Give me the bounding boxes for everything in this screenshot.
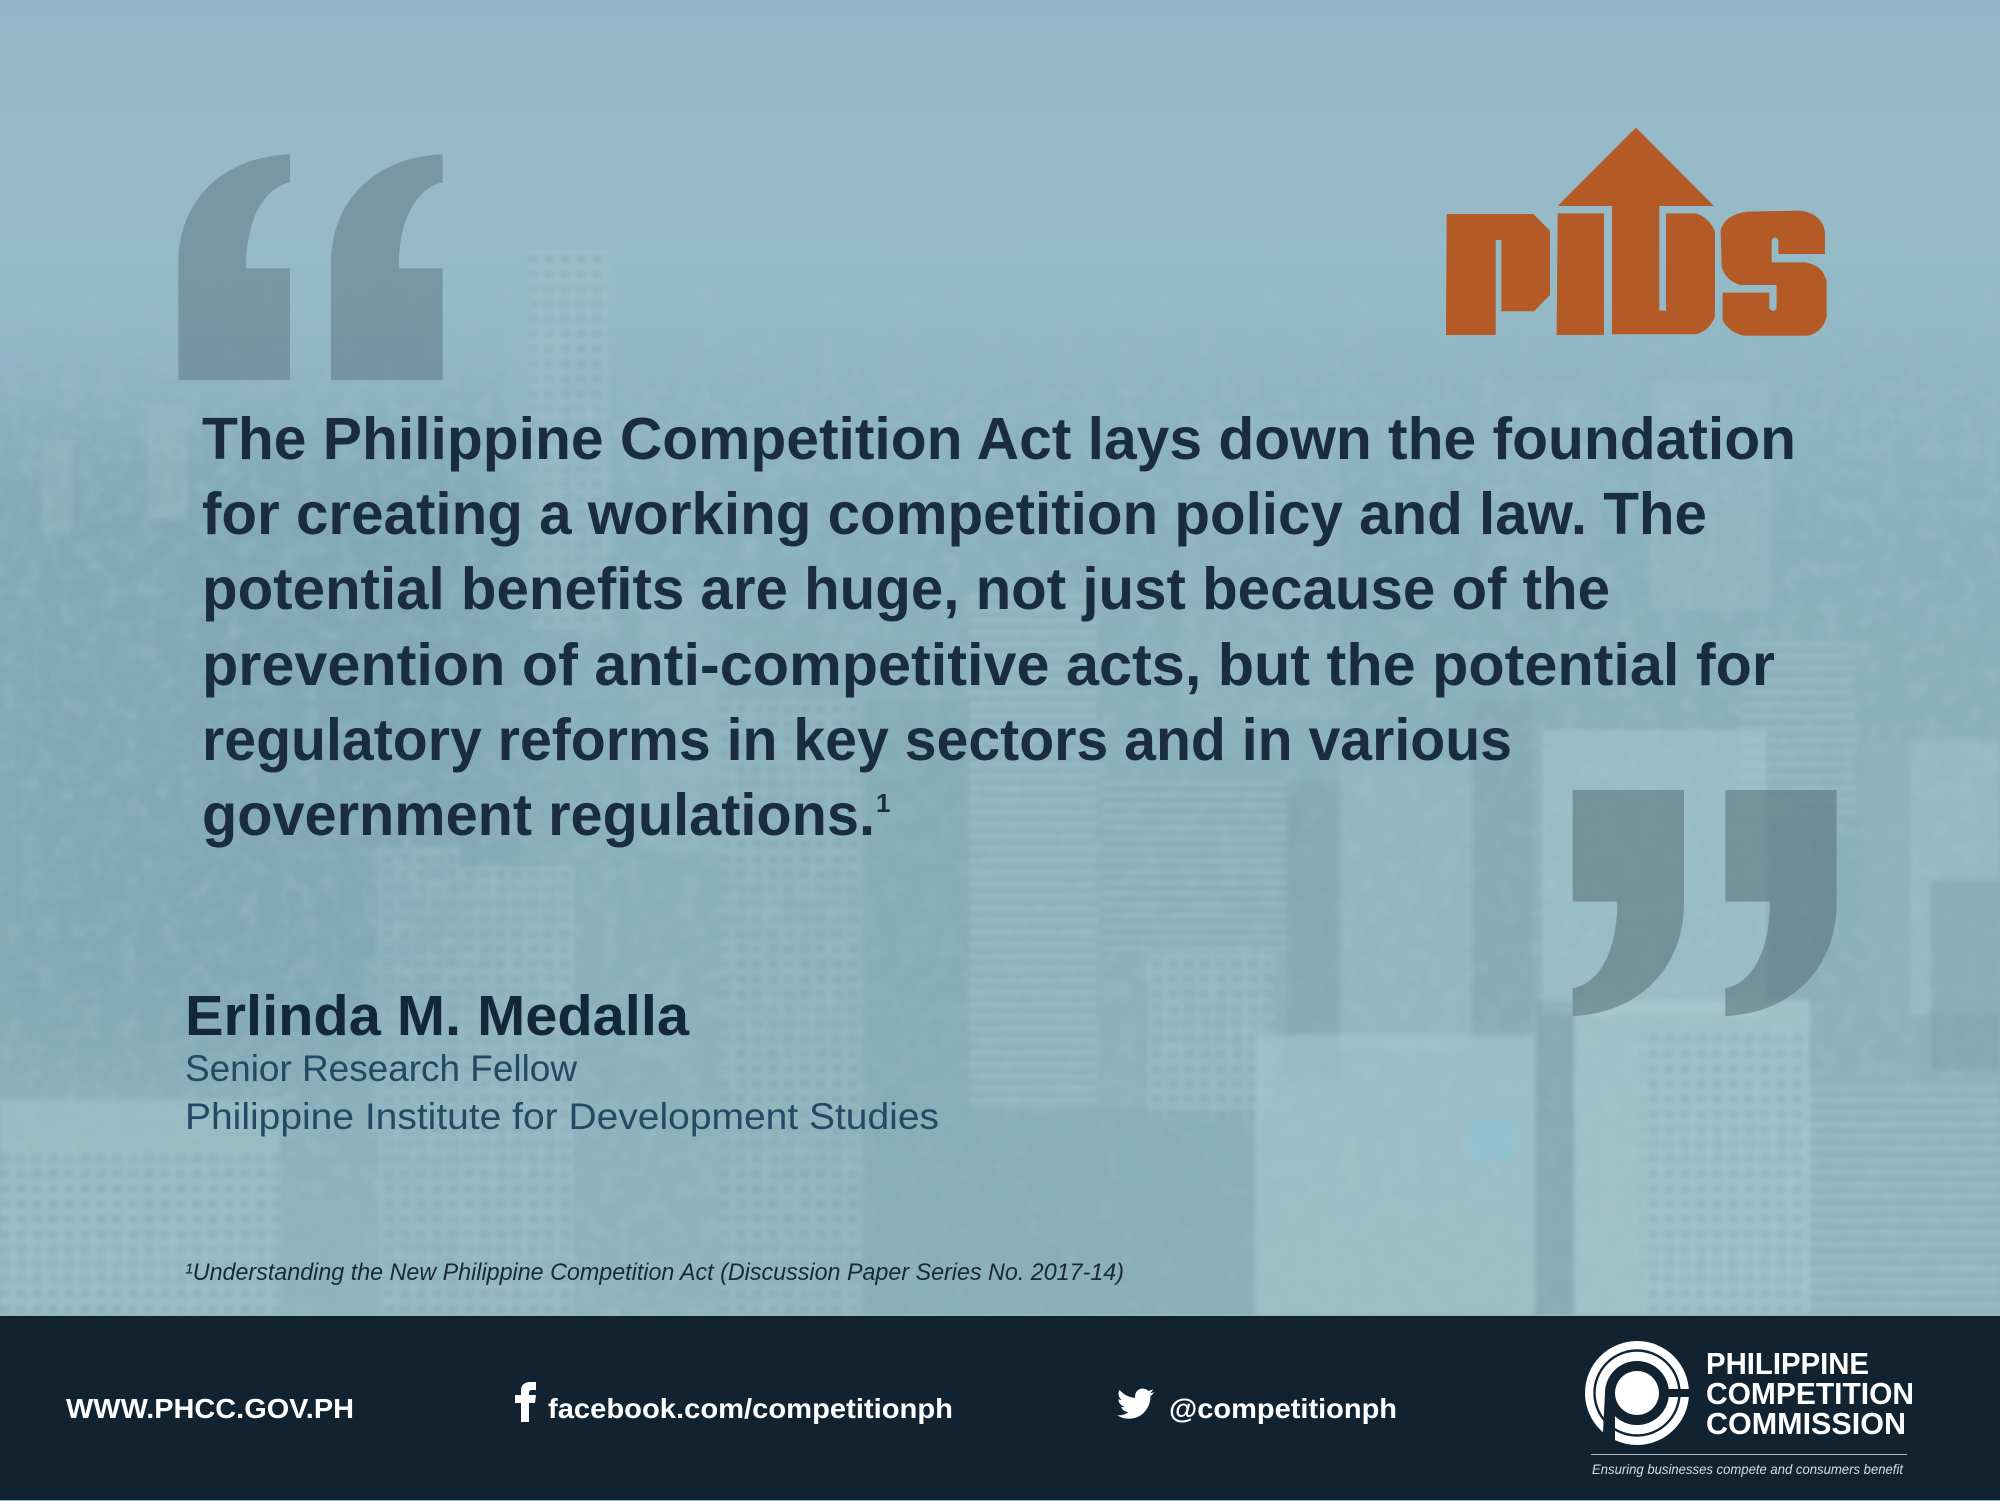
twitter handle: @competitionph bbox=[1169, 1393, 1397, 1424]
PIDS logo bbox=[1446, 128, 1827, 336]
website address: WWW.PHCC.GOV.PH bbox=[66, 1393, 354, 1424]
quote text: government regulations. bbox=[202, 782, 875, 848]
icon: PCC logo mark bbox=[1585, 1341, 1692, 1446]
footer bar bbox=[0, 1316, 2000, 1501]
PCC tagline: Ensuring businesses compete and consumers benefit bbox=[1592, 1461, 1904, 1477]
quote text: The Philippine Competition Act lays down the foundation bbox=[202, 406, 1796, 472]
quote text: 1 bbox=[876, 788, 890, 818]
PCC name: COMPETITION bbox=[1706, 1376, 1914, 1411]
icon: twitter bbox=[1117, 1388, 1154, 1419]
author title and institution: Senior Research Fellow bbox=[185, 1048, 577, 1089]
quote text: regulatory reforms in key sectors and in various bbox=[202, 707, 1512, 773]
opening quotation mark bbox=[178, 154, 443, 380]
closing quotation mark bbox=[1573, 790, 1837, 1016]
facebook handle: facebook.com/competitionph bbox=[548, 1393, 953, 1424]
quote text: prevention of anti-competitive acts, but the potential for bbox=[202, 632, 1775, 698]
footnote: ¹Understanding the New Philippine Competition Act (Discussion Paper Series No. 2017-14) bbox=[185, 1259, 1124, 1286]
PCC name: PHILIPPINE bbox=[1706, 1346, 1869, 1381]
icon: facebook bbox=[515, 1382, 536, 1422]
quote text: potential benefits are huge, not just because of the bbox=[202, 556, 1610, 622]
quote text: for creating a working competition policy and law. The bbox=[202, 481, 1707, 547]
author title and institution: Philippine Institute for Development Studies bbox=[185, 1096, 939, 1137]
author name: Erlinda M. Medalla bbox=[185, 984, 690, 1048]
PCC name: COMMISSION bbox=[1706, 1406, 1906, 1441]
